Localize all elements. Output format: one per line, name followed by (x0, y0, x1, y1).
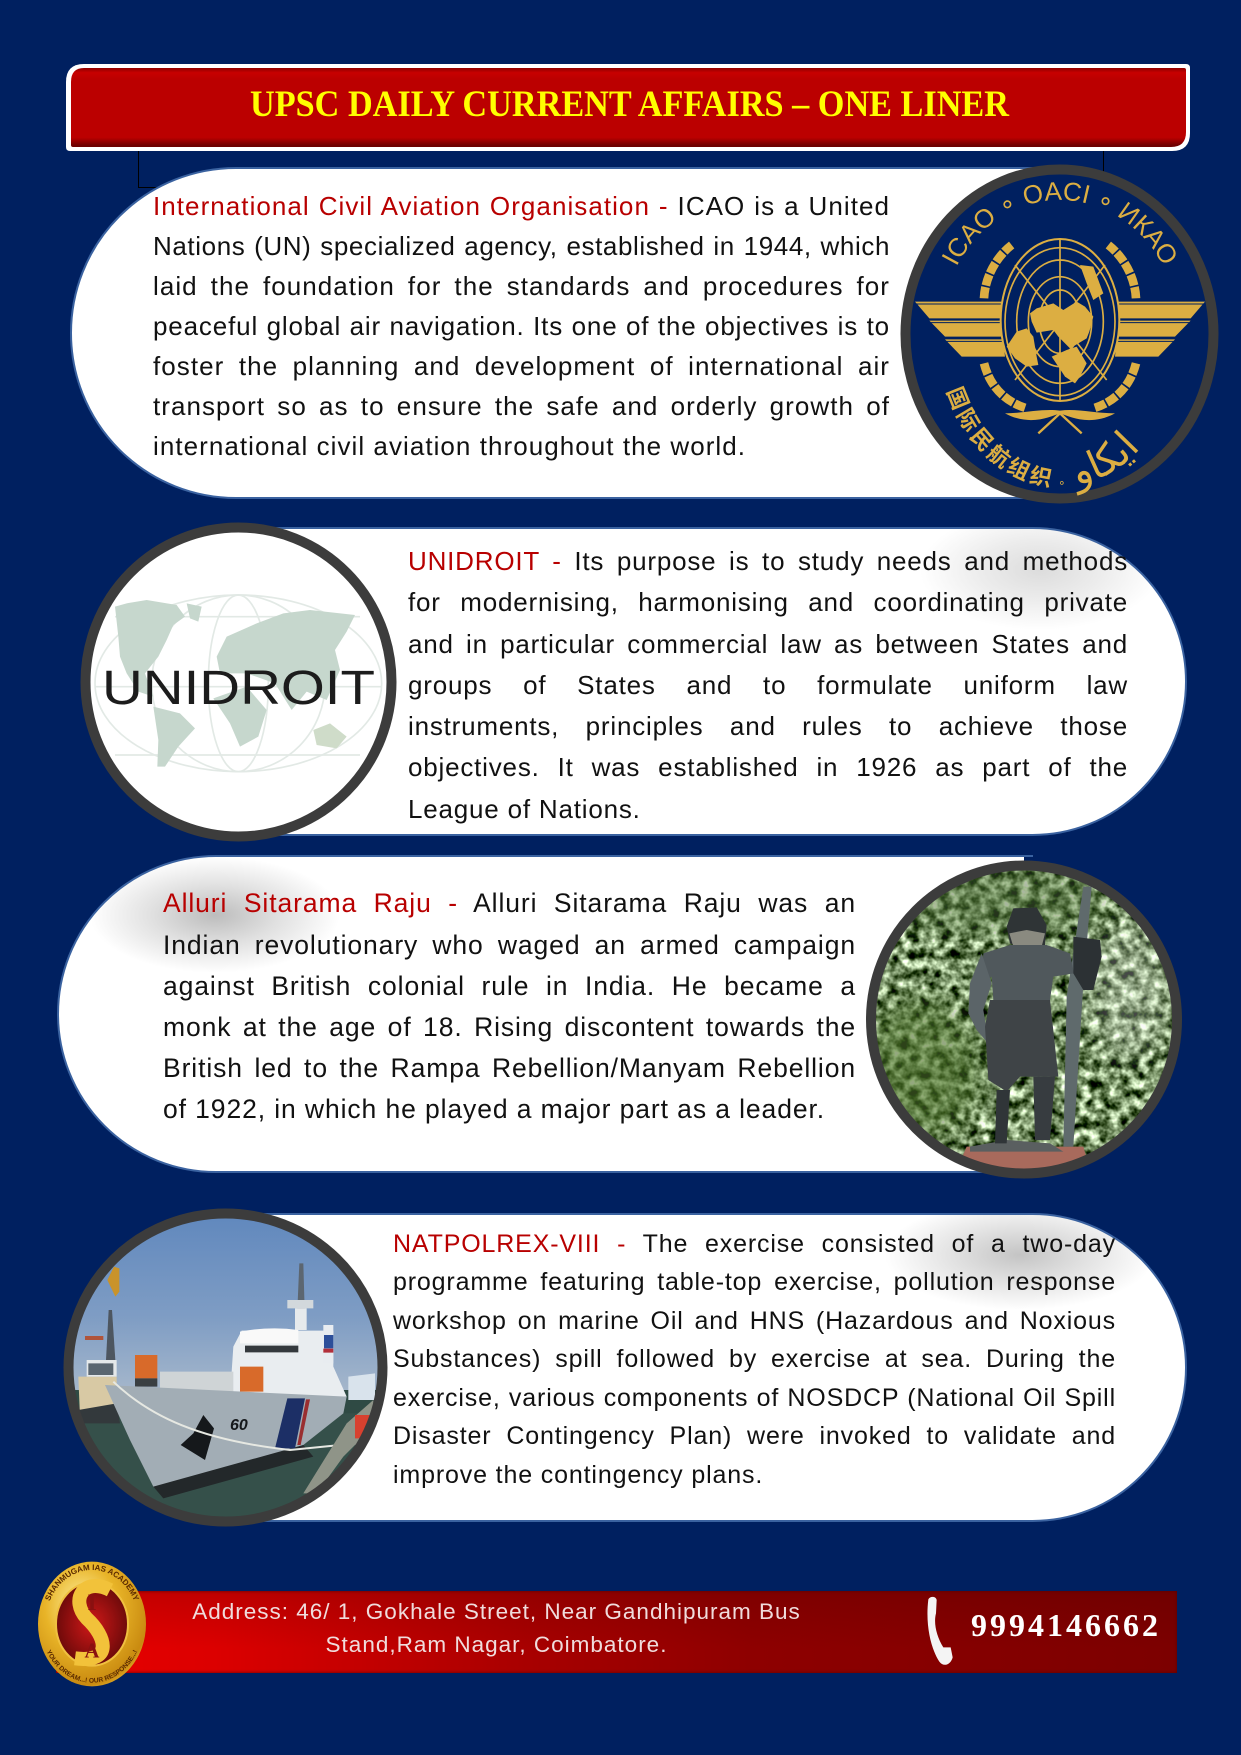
panel: Alluri Sitarama Raju (57, 855, 1182, 1178)
icon: ICAO emblem: ايكاو (1076, 430, 1138, 496)
card background: ICAO (70, 167, 1032, 499)
card background: UNIDROIT (276, 527, 1187, 836)
text: NATPOLREX: Disaster Contingency Plan) were invoked to validate and (393, 1422, 1116, 1450)
text: Raju: of 1922, in which he played a major part as a leader. (163, 1094, 825, 1124)
text: Raju: Indian revolutionary who waged an armed campaign (163, 930, 856, 960)
footer bar (38, 1562, 1177, 1686)
text: ICAO (153, 191, 890, 461)
icon: academy logo: I (87, 1590, 97, 1616)
text: Raju: monk at the age of 18. Rising discontent towards the (163, 1012, 856, 1042)
icon: academy logo: SHANMUGAM IAS ACADEMY (45, 1564, 140, 1600)
connector frame behind title (138, 150, 1104, 188)
text: NATPOLREX (393, 1230, 1116, 1489)
icon: ICAO emblem (900, 164, 1218, 504)
phone number: 9994146662 (971, 1607, 1161, 1643)
title banner (66, 64, 1190, 151)
icon: statue photo (866, 860, 1182, 1178)
text: NATPOLREX: NATPOLREX-VIII - The exercise consisted of a two-day (393, 1230, 1116, 1258)
panel: ICAO (70, 164, 1218, 504)
icon: ship photo: 60 (230, 1417, 248, 1434)
text: UNIDROIT: groups of States and to formulate uniform law (408, 670, 1128, 700)
panel: UNIDROIT (80, 522, 1187, 842)
icon: academy logo (38, 1562, 146, 1686)
text: ICAO: foster the planning and development of international air (153, 351, 890, 381)
text: UNIDROIT: for modernising, harmonising and coordinating private (408, 587, 1128, 617)
icon: UNIDROIT logo: UNIDROIT (102, 662, 375, 715)
footer background (56, 1591, 1177, 1673)
text: NATPOLREX: workshop on marine Oil and HNS (Hazardous and Noxious (393, 1307, 1116, 1335)
text: Raju (163, 888, 856, 1124)
text: UNIDROIT: objectives. It was established in 1926 as part of the (408, 752, 1128, 782)
text: NATPOLREX: programme featuring table-top exercise, pollution response (393, 1268, 1116, 1296)
address text: Address: 46/ 1, Gokhale Street, Near Gandhipuram Bus (192, 1599, 801, 1624)
text: Raju: British led to the Rampa Rebellion/Manyam Rebellion (163, 1053, 856, 1083)
icon: ICAO emblem: ICAO ∘ OACI ∘ ИКАО (942, 182, 1176, 265)
panel: NATPOLREX-VIII (64, 1208, 1187, 1526)
text: ICAO: peaceful global air navigation. Its one of the objectives is to (153, 311, 890, 341)
icon: ICAO emblem: ∘ (1060, 481, 1064, 485)
address text: Stand,Ram Nagar, Coimbatore. (326, 1632, 667, 1657)
icon: academy logo: YOUR DREAM...! OUR RESPONSE...! (47, 1649, 138, 1683)
text: Raju: Alluri Sitarama Raju - Alluri Sitarama Raju was an (163, 888, 856, 918)
icon: academy logo: A (85, 1640, 100, 1662)
title text: UPSC DAILY CURRENT AFFAIRS – ONE LINER (250, 84, 1010, 125)
text: UNIDROIT (408, 546, 1128, 824)
card background: Raju (57, 855, 1033, 1173)
text: UNIDROIT: instruments, principles and rules to achieve those (408, 711, 1128, 741)
text: NATPOLREX: exercise, various components of NOSDCP (National Oil Spill (393, 1384, 1116, 1412)
text: ICAO: laid the foundation for the standards and procedures for (153, 271, 890, 301)
text: ICAO: transport so as to ensure the safe and orderly growth of (153, 391, 890, 421)
address text (192, 1599, 801, 1657)
icon: phone (927, 1596, 953, 1665)
text: ICAO: Nations (UN) specialized agency, established in 1944, which (153, 231, 890, 261)
text: UNIDROIT: and in particular commercial law as between States and (408, 629, 1128, 659)
text: NATPOLREX: Substances) spill followed by exercise at sea. During the (393, 1345, 1116, 1373)
icon: ICAO emblem: 国际民航组织 (945, 386, 1052, 488)
text: UNIDROIT: UNIDROIT - Its purpose is to study needs and methods (408, 546, 1128, 576)
text: UNIDROIT: League of Nations. (408, 794, 641, 824)
icon: ship photo (64, 1208, 388, 1526)
card background: NATPOLREX (264, 1213, 1187, 1522)
icon: UNIDROIT logo (80, 522, 396, 842)
text: ICAO: international civil aviation throughout the world. (153, 431, 746, 461)
text: NATPOLREX: improve the contingency plans. (393, 1461, 763, 1489)
text: Raju: against British colonial rule in India. He became a (163, 971, 856, 1001)
text: ICAO: International Civil Aviation Organisation - ICAO is a United (153, 191, 890, 221)
